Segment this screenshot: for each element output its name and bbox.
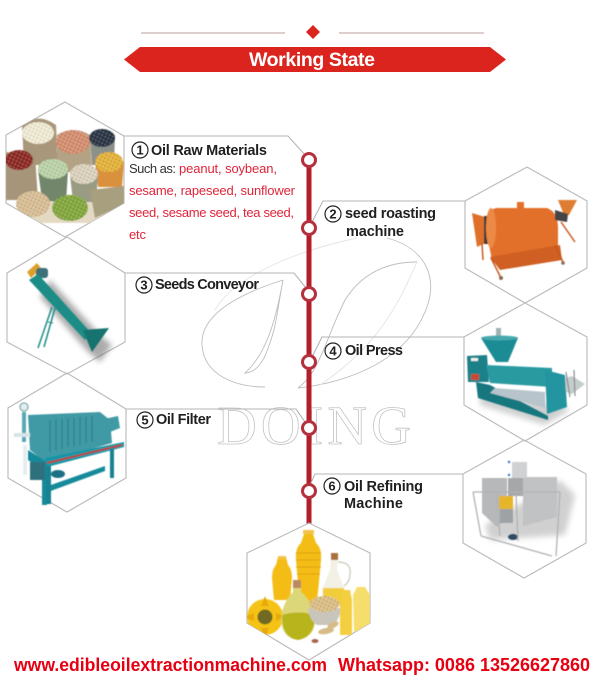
heading: Oil Press [345,343,403,359]
heading: Machine [344,496,403,512]
label 1: oil raw materials [129,142,296,242]
number 2: 2 [329,206,337,222]
title banner [124,47,506,72]
hexagon: oil filter [8,373,126,512]
hexagon: edible oil products [244,523,370,660]
watermark logo [202,238,431,456]
connector 2 [312,201,465,222]
node 1 [302,154,316,166]
label 5: oil filter [137,412,211,428]
number 3: 3 [140,278,148,292]
label 4: oil press [325,343,403,359]
description: etc [129,227,146,242]
number 5: 5 [141,412,149,428]
heading: seed roasting [345,206,436,222]
website: www.edibleoilextractionmachine.com [13,655,327,675]
heading: Oil Refining [344,479,423,495]
number 6: 6 [328,478,336,494]
connector 3 [125,273,306,288]
hexagon: seeds conveyor [7,237,125,374]
hexagon: oil press [464,303,587,441]
heading [345,206,436,240]
header ornament [141,25,484,39]
connector 1 [124,136,305,155]
label 2: seed roasting machine [325,206,436,240]
hexagon: seed roasting machine [465,167,587,303]
heading: Seeds Conveyor [155,277,259,293]
title banner: Working State [249,49,375,71]
connector 6 [310,474,463,485]
label 3: seeds conveyor [136,277,259,293]
heading: machine [346,224,404,240]
process line [124,136,465,524]
label 6: oil refining machine [324,478,423,512]
description: sesame, rapeseed, sunflower [129,183,296,198]
number 1: 1 [136,142,144,158]
whatsapp: Whatsapp: 0086 13526627860 [338,655,590,675]
number 4: 4 [329,344,337,358]
description: Such as: [129,161,176,176]
heading: Oil Raw Materials [151,143,267,159]
hexagon: raw materials [5,102,124,237]
hexagon: oil refining machine [463,440,586,578]
connector 5 [126,409,305,422]
heading: Oil Filter [156,412,211,428]
heading [344,479,423,512]
node 3 [302,288,316,300]
description [129,161,296,242]
node 2 [302,222,316,234]
connector 4 [312,337,464,357]
description: seed, sesame seed, tea seed, [129,205,294,220]
node 4 [302,356,316,368]
number 1 [132,142,148,158]
node 6 [302,484,316,498]
description: peanut, soybean, [179,161,277,176]
watermark logo: DOING [217,395,411,456]
node 5 [302,422,316,434]
footer contact [13,655,590,675]
